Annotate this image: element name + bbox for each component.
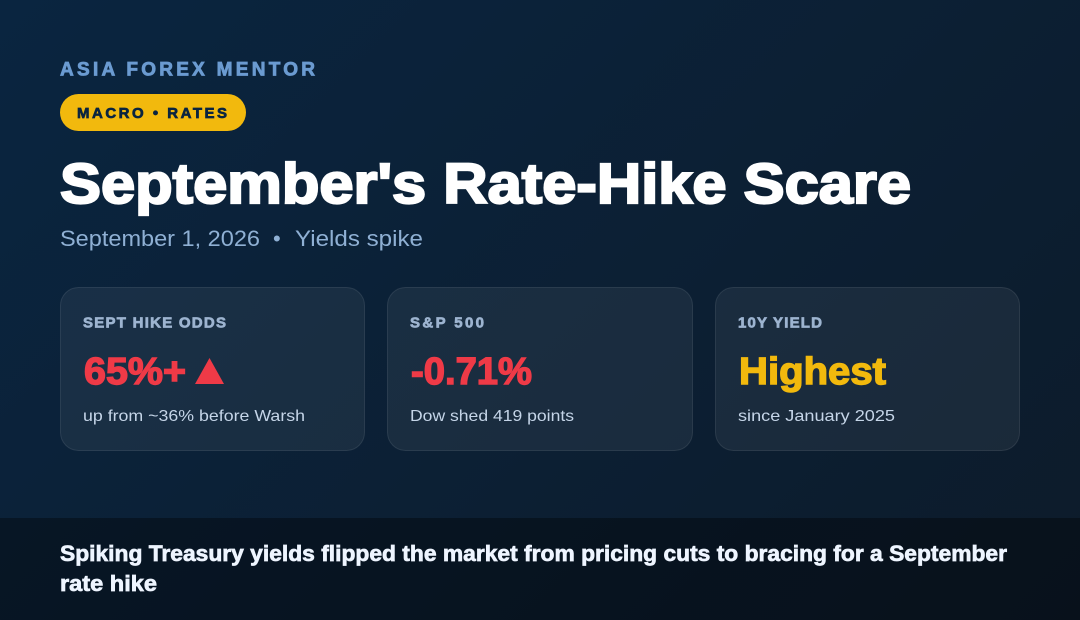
label: 10Y YIELD <box>738 314 822 332</box>
label: SEPT HIKE ODDS <box>83 314 226 332</box>
title: September's Rate-Hike Scare <box>60 152 911 216</box>
label: S&P 500 <box>410 314 484 332</box>
category pill <box>60 94 246 131</box>
icon: up triangle <box>195 358 224 384</box>
takeaway text <box>60 541 1007 596</box>
brand name: ASIA FOREX MENTOR <box>60 60 315 80</box>
note: Dow shed 419 points <box>410 408 574 425</box>
note: up from ~36% before Warsh <box>83 408 305 425</box>
panel: sept hike odds <box>60 288 364 450</box>
subtitle: Yields spike <box>295 226 423 251</box>
takeaway text: Spiking Treasury yields flipped the market from pricing cuts to bracing for a September <box>60 541 1007 566</box>
category pill: MACRO • RATES <box>77 105 227 122</box>
takeaway text: rate hike <box>60 571 157 596</box>
value: Highest <box>739 351 886 393</box>
note: since January 2025 <box>738 408 895 425</box>
panel: S&P 500 <box>388 288 692 450</box>
subtitle: • <box>273 226 281 251</box>
value: -0.71% <box>411 351 532 393</box>
subtitle: September 1, 2026 <box>60 226 260 251</box>
panel: 10Y yield <box>716 288 1020 450</box>
subtitle <box>60 226 423 251</box>
value: 65%+ <box>84 351 186 393</box>
footer band <box>0 518 1080 620</box>
